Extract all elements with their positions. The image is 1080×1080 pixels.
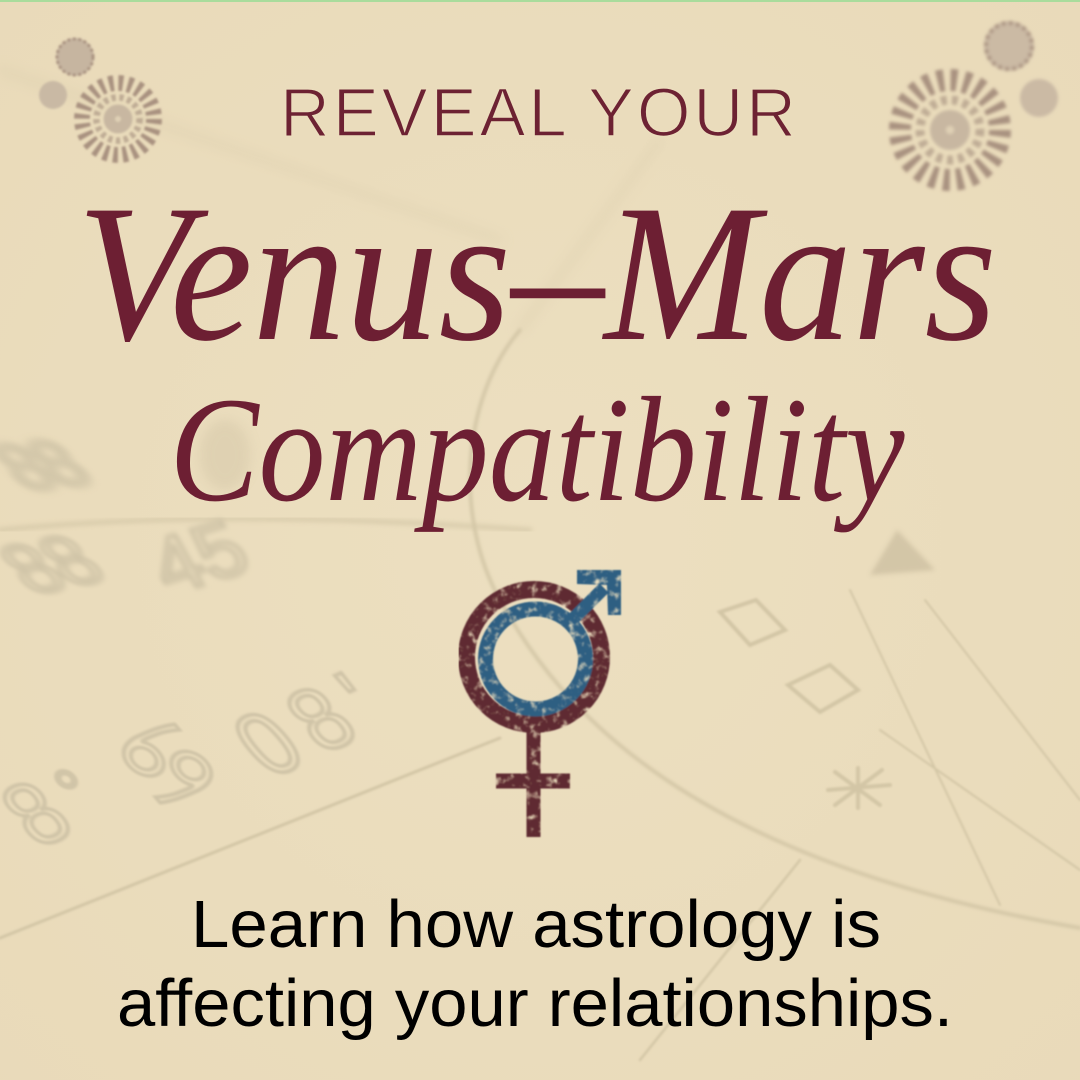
background: blurred astrology chart: 08' [213,650,416,796]
background: blurred astrology chart: 45 [134,504,263,611]
text block: call to action: Learn how astrology is [191,887,881,962]
background: blurred astrology chart: ° [39,755,114,829]
heading: reveal your: REVEAL YOUR [280,74,796,151]
title: Compatibility: Compatibility [170,367,905,533]
icon: interlocked Venus and Mars symbol [466,570,621,837]
background: blurred astrology chart: ♋ [86,694,252,836]
text block: call to action: affecting your relationships. [117,966,953,1041]
icon: rosettes top-right [900,21,1058,180]
text block: call to action [117,887,953,1041]
title: Venus-Mars: Venus–Mars [77,165,997,382]
icon: small rosettes top-left [39,38,154,155]
